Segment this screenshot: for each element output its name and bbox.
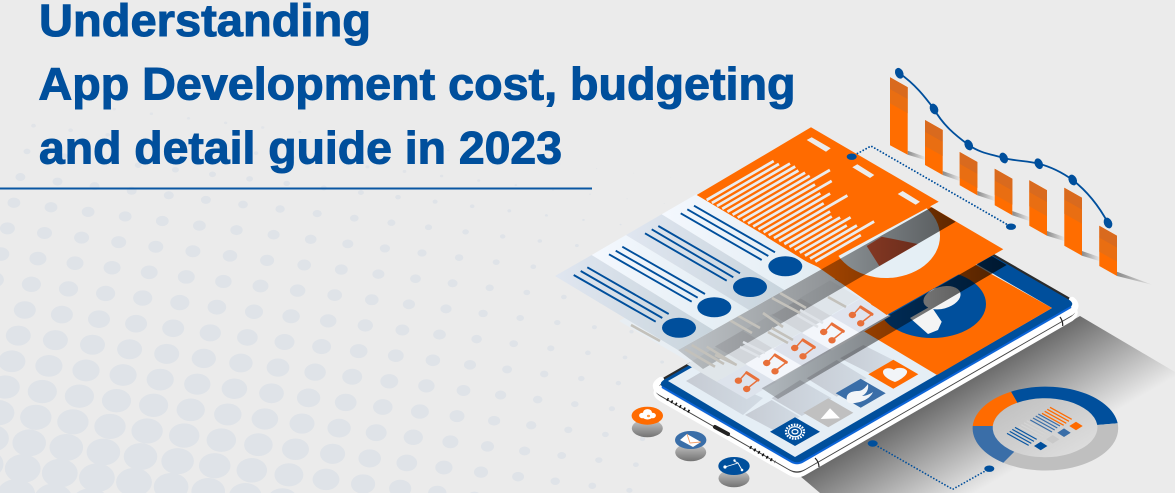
translucent band on tablet bbox=[762, 256, 1007, 399]
pie chart bbox=[838, 208, 940, 278]
bar chart sheet bbox=[697, 127, 939, 267]
profile circle bbox=[878, 270, 986, 338]
button: mail bbox=[675, 431, 706, 461]
list lines bbox=[574, 206, 775, 322]
title: App Development cost, budgeting bbox=[38, 58, 796, 110]
bar shadows bbox=[908, 151, 1153, 285]
sheet labels bbox=[807, 137, 920, 205]
list bullets bbox=[662, 256, 802, 338]
donut legend bbox=[1007, 407, 1083, 450]
isometric bar chart bbox=[890, 67, 1153, 285]
dotted connector: chart sheet bbox=[847, 146, 1016, 230]
tablet bbox=[656, 222, 1075, 475]
list sheet bbox=[555, 194, 820, 350]
music tile row bbox=[717, 298, 891, 399]
title: and detail guide in 2023 bbox=[39, 122, 562, 173]
translucent band across sheets bbox=[678, 207, 956, 369]
tablet shadow bbox=[800, 316, 1175, 493]
sheet text lines bbox=[631, 293, 846, 367]
plain tiles bbox=[686, 345, 893, 430]
profile icon bbox=[910, 282, 963, 334]
tablet screen bbox=[668, 234, 1052, 457]
heart tile bbox=[868, 360, 918, 389]
flame tile bbox=[836, 379, 886, 408]
play tile bbox=[803, 398, 853, 427]
dotted connector: donut bbox=[868, 440, 994, 489]
orange screen image bbox=[850, 244, 1052, 375]
title bbox=[38, 0, 796, 173]
button: cloud bbox=[632, 407, 663, 437]
donut chart bbox=[973, 387, 1118, 471]
title underline bbox=[0, 188, 592, 190]
pie sheet bbox=[766, 206, 1004, 315]
trend line bbox=[893, 67, 1114, 230]
histogram bars bbox=[707, 161, 874, 262]
button: share bbox=[718, 457, 750, 487]
bars bbox=[890, 77, 1117, 276]
text sheet bbox=[619, 240, 860, 382]
settings tile bbox=[770, 417, 820, 446]
